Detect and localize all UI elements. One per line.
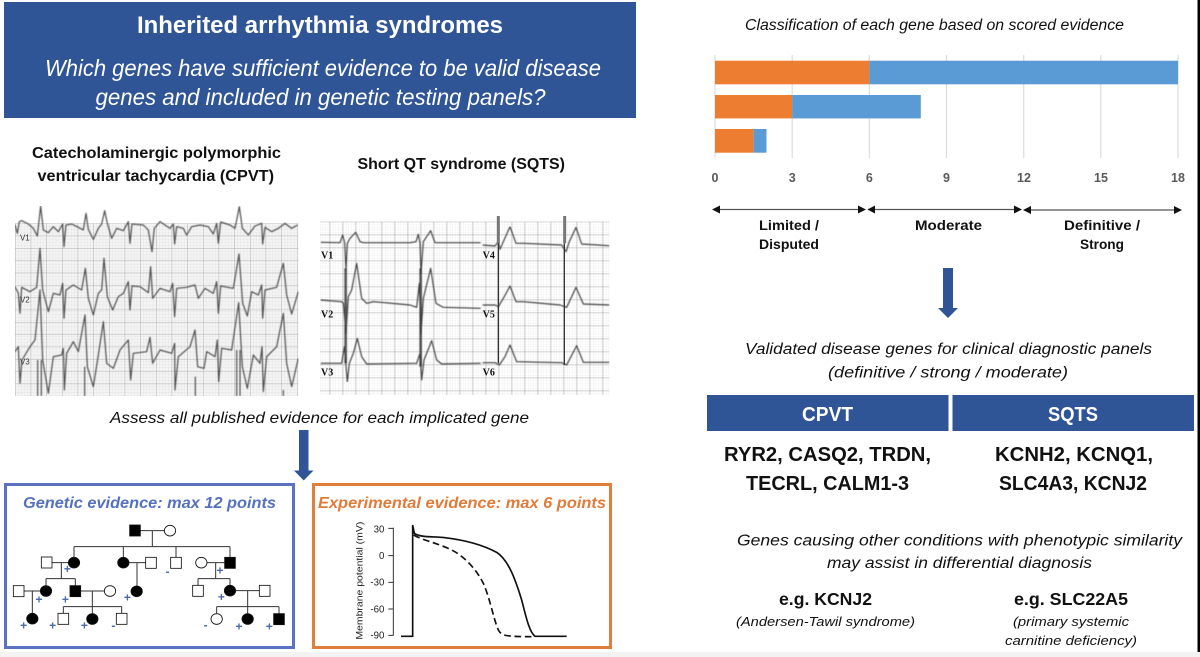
SQTS gene column: SLC4A3, KCNJ2	[999, 473, 1147, 495]
ECG: SQTS: V5	[483, 309, 495, 320]
differential diagnosis caption	[737, 532, 1183, 572]
example: SLC22A5: (primary systemic	[1013, 614, 1130, 629]
action potential chart: -90	[370, 630, 384, 641]
arrow: down to validated genes	[938, 268, 958, 318]
axis tick labels: 3	[789, 171, 796, 185]
ECG: CPVT	[15, 206, 298, 396]
differential diagnosis caption: Genes causing other conditions with phenotypic similarity	[737, 532, 1183, 550]
band label: limited / disputed: Limited /	[759, 218, 819, 233]
ECG: SQTS: V6	[483, 367, 495, 378]
axis tick labels: 9	[943, 171, 950, 185]
CPVT gene column: CPVT	[802, 404, 853, 426]
subtitle: genes and included in genetic testing panels?	[96, 84, 546, 110]
heading: SQTS: Short QT syndrome (SQTS)	[358, 156, 565, 173]
SQTS gene column	[952, 395, 1194, 495]
action potential chart: Membrane potential (mV)	[354, 522, 364, 640]
pedigree chart: +	[266, 619, 273, 633]
SQTS gene column: SQTS	[1048, 404, 1098, 426]
header panel	[4, 2, 636, 118]
validated genes caption	[745, 341, 1152, 382]
axis tick labels: 12	[1017, 171, 1031, 185]
validated genes caption: (definitive / strong / moderate)	[828, 364, 1068, 382]
heading: CPVT	[32, 145, 281, 185]
pedigree chart: +	[49, 619, 56, 633]
example: SLC22A5: e.g. SLC22A5	[1014, 589, 1128, 609]
band label: definitive / strong	[1064, 218, 1140, 252]
experimental evidence heading: Experimental evidence: max 6 points	[318, 495, 606, 512]
pedigree chart: -	[204, 618, 208, 632]
example: KCNJ2: e.g. KCNJ2	[779, 589, 872, 609]
pedigree chart: +	[62, 593, 69, 607]
ECG: SQTS	[320, 216, 609, 395]
range arrows	[712, 206, 1182, 214]
subtitle	[45, 55, 601, 110]
pedigree chart: +	[216, 563, 223, 577]
arrow: down to evidence panels	[294, 430, 314, 480]
action potential chart: 0	[379, 551, 384, 562]
axis tick labels: 18	[1171, 171, 1185, 185]
pedigree chart: +	[20, 619, 27, 633]
genetic evidence heading: Genetic evidence: max 12 points	[23, 495, 276, 512]
action potential chart: -60	[370, 604, 384, 615]
title: Inherited arrhythmia syndromes	[137, 12, 503, 39]
pedigree chart: +	[81, 619, 88, 633]
pedigree chart: +	[218, 590, 225, 604]
pedigree chart: -	[166, 565, 170, 579]
band label: limited / disputed	[759, 218, 819, 252]
panel: genetic evidence	[6, 484, 294, 648]
subtitle: Which genes have sufficient evidence to be valid disease	[45, 55, 601, 81]
example: KCNJ2	[736, 589, 915, 629]
ECG: CPVT: V3	[20, 358, 30, 367]
heading: CPVT: ventricular tachycardia (CPVT)	[38, 168, 274, 185]
panel: experimental evidence	[314, 484, 610, 648]
action potential chart: 30	[374, 524, 384, 535]
pedigree chart	[13, 525, 284, 633]
pedigree chart: -	[111, 619, 115, 633]
classification heading: Classification of each gene based on scored evidence	[745, 17, 1124, 34]
ECG: CPVT: V2	[20, 296, 30, 305]
band label: definitive / strong: Strong	[1080, 237, 1124, 252]
example: SLC22A5	[1005, 589, 1137, 648]
action potential chart	[354, 522, 567, 641]
example: SLC22A5: carnitine deficiency)	[1005, 633, 1137, 648]
axis tick labels: 15	[1094, 171, 1108, 185]
band label: definitive / strong: Definitive /	[1064, 218, 1140, 233]
differential diagnosis caption: may assist in differential diagnosis	[827, 555, 1092, 572]
CPVT gene column: TECRL, CALM1-3	[746, 473, 909, 495]
ECG: SQTS: V3	[321, 367, 333, 378]
CPVT gene column: RYR2, CASQ2, TRDN,	[724, 444, 931, 466]
ECG: SQTS: V4	[483, 251, 495, 262]
band label: moderate: Moderate	[915, 218, 983, 233]
pedigree chart: +	[124, 591, 131, 605]
validated genes caption: Validated disease genes for clinical diagnostic panels	[745, 341, 1152, 358]
example: KCNJ2: (Andersen-Tawil syndrome)	[736, 614, 915, 629]
CPVT gene column	[707, 395, 948, 495]
stacked bar chart	[712, 55, 1185, 185]
assess caption: Assess all published evidence for each implicated gene	[109, 410, 529, 427]
SQTS gene column: KCNH2, KCNQ1,	[995, 444, 1153, 466]
axis tick labels	[712, 171, 1185, 185]
ECG: SQTS: V2	[321, 309, 333, 320]
pedigree chart: +	[35, 593, 42, 607]
band label: limited / disputed: Disputed	[759, 237, 819, 252]
axis tick labels: 0	[712, 171, 719, 185]
pedigree chart: +	[235, 619, 242, 633]
pedigree chart: +	[64, 562, 71, 576]
ECG: SQTS: V1	[321, 251, 333, 262]
action potential chart: -30	[370, 578, 384, 589]
heading: CPVT: Catecholaminergic polymorphic	[32, 145, 281, 162]
axis tick labels: 6	[866, 171, 873, 185]
ECG: CPVT: V1	[20, 234, 30, 243]
